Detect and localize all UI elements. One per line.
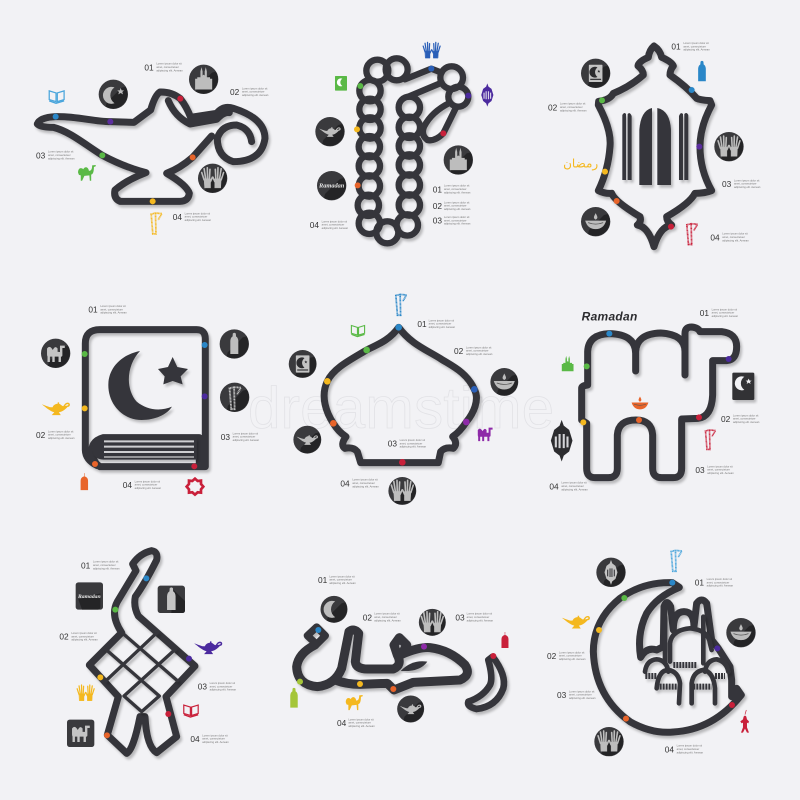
label 03: Lorem ipsum dolor sit bbox=[210, 682, 235, 685]
label 01: amet, consectetuer bbox=[444, 187, 467, 191]
label 01: 01 bbox=[144, 62, 154, 72]
label 03: amet, consectetuer bbox=[210, 684, 232, 688]
label 03: 03 bbox=[198, 682, 207, 692]
icon: hands bbox=[423, 42, 440, 58]
label 03: amet, consectetuer bbox=[734, 182, 757, 186]
label 04: adipiscing elit. Aenean bbox=[202, 740, 229, 744]
icon: lantern bbox=[551, 420, 572, 461]
label 03: adipiscing elit. Aenean bbox=[467, 618, 494, 622]
label 02: 02 bbox=[721, 414, 731, 424]
crescent bbox=[108, 351, 172, 420]
label 02: amet, consectetuer bbox=[560, 105, 583, 109]
icon: tag lantern bbox=[501, 632, 508, 648]
label 04 bbox=[665, 744, 704, 754]
label 02 bbox=[548, 102, 587, 112]
label 01: Lorem ipsum dolor sit bbox=[712, 308, 737, 311]
label 04: amet, consectetuer bbox=[348, 721, 371, 725]
icon: mosque disc bbox=[189, 65, 218, 94]
label 02: Lorem ipsum dolor sit bbox=[560, 103, 585, 106]
label 01: Lorem ipsum dolor sit bbox=[429, 319, 454, 322]
calligraphy dot bbox=[401, 661, 427, 671]
label 04: Lorem ipsum dolor sit bbox=[561, 482, 587, 485]
icon: person disc bbox=[220, 329, 249, 359]
route markers bbox=[596, 580, 735, 722]
label 03: Lorem ipsum dolor sit bbox=[400, 439, 425, 442]
icon: lamp disc bbox=[315, 117, 345, 146]
label 04: adipiscing elit. Aenean bbox=[322, 226, 349, 230]
route markers bbox=[53, 96, 196, 204]
icon: diya disc bbox=[581, 207, 610, 236]
label 04: Lorem ipsum dolor sit bbox=[135, 480, 160, 483]
icon: prayer beads bbox=[151, 213, 162, 234]
label 02: adipiscing elit. Aenean bbox=[48, 436, 75, 440]
Ramadan wordmark: Ramadan bbox=[582, 310, 637, 324]
label 04 bbox=[190, 733, 229, 744]
label 01: amet, consectetuer bbox=[100, 307, 123, 311]
label 04: Lorem ipsum dolor sit bbox=[352, 479, 378, 482]
label 02 bbox=[721, 413, 760, 424]
icon: hands bbox=[77, 685, 94, 701]
label 02: amet, consectetuer bbox=[48, 433, 71, 437]
label 02: 02 bbox=[433, 201, 442, 211]
track: bead chain bbox=[358, 58, 468, 243]
icon: camel disc bbox=[41, 339, 70, 368]
track: dome outline bbox=[324, 327, 476, 463]
icon: book bbox=[351, 326, 365, 337]
label 04: adipiscing elit. Aenean bbox=[185, 218, 212, 222]
label 01: adipiscing elit. Aenean bbox=[329, 581, 356, 585]
label 02: adipiscing elit. Aenean bbox=[466, 352, 493, 356]
label 04: amet, consectetuer bbox=[185, 215, 207, 219]
icon: orange lantern tag bbox=[81, 473, 88, 490]
label 02 bbox=[454, 345, 493, 356]
label 03: amet, consectetuer bbox=[48, 153, 71, 157]
label 04: amet, consectetuer bbox=[322, 223, 344, 227]
label 03: 03 bbox=[388, 439, 397, 449]
track: ketupat outline bbox=[89, 551, 195, 753]
label 04: 04 bbox=[173, 212, 182, 222]
label 04: 04 bbox=[337, 718, 347, 728]
label 02: amet, consectetuer bbox=[733, 417, 756, 421]
icon: camel bbox=[478, 428, 493, 441]
panel: prayer beads timeline bbox=[310, 42, 493, 243]
icon: person bbox=[698, 61, 706, 81]
route markers bbox=[324, 324, 478, 466]
label 04: Lorem ipsum dolor sit bbox=[322, 220, 347, 223]
label 01: amet, consectetuer bbox=[683, 44, 706, 48]
icon: diya disc bbox=[726, 618, 756, 647]
label 02: 02 bbox=[548, 102, 558, 112]
label 03 bbox=[722, 178, 761, 189]
label 01: amet, consectetuer bbox=[707, 580, 729, 584]
label 03: adipiscing elit. Aenean bbox=[210, 688, 237, 692]
icon: hands disc bbox=[198, 164, 227, 193]
label 01 bbox=[81, 560, 120, 570]
label 02: 02 bbox=[547, 651, 557, 661]
label 01: adipiscing elit. Aenean bbox=[444, 190, 471, 194]
icon: Ramadan disc bbox=[317, 171, 346, 200]
label 01: 01 bbox=[700, 308, 709, 318]
label 01: Lorem ipsum dolor sit bbox=[707, 578, 732, 581]
label 01 bbox=[417, 318, 456, 329]
label 03: Lorem ipsum dolor sit bbox=[48, 151, 73, 154]
label 01: adipiscing elit. Aenean bbox=[93, 566, 120, 570]
label 01: amet, consectetuer bbox=[429, 322, 451, 326]
ketupat grid weave bbox=[105, 632, 177, 712]
label 03: amet, consectetuer bbox=[444, 218, 467, 222]
icon: book bbox=[49, 91, 64, 103]
icon: prayer beads bbox=[396, 294, 407, 315]
label 03: 03 bbox=[695, 465, 705, 475]
label 02 bbox=[433, 200, 471, 211]
label 03: Lorem ipsum dolor sit bbox=[707, 465, 733, 468]
label 04: amet, consectetuer bbox=[352, 481, 375, 485]
label 02 bbox=[36, 429, 75, 440]
label 03: 03 bbox=[36, 150, 46, 160]
label 03: amet, consectetuer bbox=[467, 615, 489, 619]
label 03 bbox=[36, 150, 75, 160]
icon: green quran bbox=[335, 76, 347, 91]
track: lamp outline bbox=[37, 92, 265, 201]
track: crescent outline bbox=[593, 583, 741, 732]
label 02: Lorem ipsum dolor sit bbox=[71, 632, 97, 635]
label 02: 02 bbox=[363, 612, 372, 622]
label 02: amet, consectetuer bbox=[242, 90, 265, 94]
label 04: adipiscing elit. Aenean bbox=[352, 484, 379, 488]
panel: camel timeline bbox=[549, 307, 760, 491]
label 03 bbox=[433, 215, 471, 226]
icon: camel bbox=[78, 165, 96, 181]
label 04: 04 bbox=[549, 481, 559, 491]
label 02: Lorem ipsum dolor sit bbox=[242, 87, 267, 90]
icon: Arabic word: رمضان bbox=[563, 156, 598, 171]
label 01: 01 bbox=[81, 560, 91, 570]
label 02: adipiscing elit. Aenean bbox=[733, 420, 760, 424]
label 04: adipiscing elit. Aenean bbox=[722, 238, 749, 242]
icon: prayer beads bbox=[705, 430, 715, 449]
label 02: 02 bbox=[59, 632, 69, 642]
panel: lantern frame timeline bbox=[548, 41, 761, 247]
label 03: amet, consectetuer bbox=[233, 435, 255, 439]
label 03: Lorem ipsum dolor sit bbox=[569, 690, 594, 693]
label 01: adipiscing elit. Aenean bbox=[712, 314, 739, 318]
icon: hands disc bbox=[714, 132, 744, 161]
label 04: Lorem ipsum dolor sit bbox=[185, 212, 210, 215]
label 04: 04 bbox=[190, 734, 200, 744]
icon: red octagram bbox=[187, 479, 203, 495]
track: lantern outline bbox=[598, 46, 712, 247]
label 01: adipiscing elit. Aenean bbox=[156, 68, 183, 72]
label 01 bbox=[88, 304, 127, 315]
label 01: 01 bbox=[433, 184, 442, 194]
label 04: adipiscing elit. Aenean bbox=[135, 486, 162, 490]
track: book outline bbox=[85, 330, 205, 467]
icon: prayer beads bbox=[671, 550, 682, 571]
label 02: Lorem ipsum dolor sit bbox=[559, 651, 584, 654]
icon: lamp disc bbox=[397, 695, 424, 722]
label 02: adipiscing elit. Aenean bbox=[374, 618, 401, 622]
label 01: Lorem ipsum dolor sit bbox=[156, 63, 182, 66]
label 02: adipiscing elit. Aenean bbox=[560, 108, 587, 112]
label 02: 02 bbox=[230, 87, 240, 97]
label 01: amet, consectetuer bbox=[712, 311, 734, 315]
icon: lamp bbox=[42, 402, 70, 415]
route markers bbox=[354, 66, 471, 188]
label 01: 01 bbox=[695, 578, 704, 588]
label 04: 04 bbox=[123, 480, 132, 490]
icon: quran disc bbox=[289, 350, 317, 378]
icon: red figure bbox=[740, 710, 749, 733]
label 02: amet, consectetuer bbox=[559, 654, 582, 658]
icon: diya disc bbox=[490, 368, 518, 396]
label 04: Lorem ipsum dolor sit bbox=[348, 718, 374, 721]
route markers bbox=[297, 627, 496, 692]
label 04: 04 bbox=[710, 232, 720, 242]
label 04: amet, consectetuer bbox=[722, 235, 745, 239]
icon: hands disc bbox=[594, 727, 624, 756]
label 04: Lorem ipsum dolor sit bbox=[722, 233, 748, 236]
icon: mosque disc bbox=[444, 145, 473, 175]
watermark: dreamstime bbox=[248, 376, 554, 441]
label 03: Lorem ipsum dolor sit bbox=[734, 179, 759, 182]
book pages bbox=[93, 438, 197, 460]
label 04: amet, consectetuer bbox=[677, 747, 699, 751]
panel: dome timeline bbox=[289, 294, 518, 505]
label 04: adipiscing elit. Aenean bbox=[677, 750, 704, 754]
label 04: adipiscing elit. Aenean bbox=[348, 724, 375, 728]
icon: camel square bbox=[67, 720, 94, 747]
label 02 bbox=[363, 612, 401, 622]
label 03 bbox=[388, 438, 427, 449]
label 03: amet, consectetuer bbox=[569, 693, 592, 697]
label 04 bbox=[173, 211, 212, 222]
label 03 bbox=[221, 431, 260, 442]
label 02: adipiscing elit. Aenean bbox=[242, 93, 269, 97]
label 01: adipiscing elit. Aenean bbox=[683, 48, 710, 52]
star bbox=[158, 357, 188, 384]
icon: dark quran bbox=[732, 373, 754, 400]
label 01: 01 bbox=[671, 42, 681, 52]
icon: prayer beads bbox=[687, 224, 698, 245]
label 04: adipiscing elit. Aenean bbox=[561, 487, 588, 491]
label 04: Lorem ipsum dolor sit bbox=[202, 734, 228, 737]
label 02: 02 bbox=[454, 346, 464, 356]
label 03: adipiscing elit. Aenean bbox=[444, 222, 471, 226]
panel: crescent mosque timeline bbox=[547, 550, 756, 756]
icon: hands disc bbox=[388, 477, 416, 505]
label 03: 03 bbox=[433, 216, 442, 226]
icon: Ramadan square bbox=[76, 582, 103, 610]
icon: lantern bbox=[481, 83, 493, 107]
label 03: adipiscing elit. Aenean bbox=[569, 696, 596, 700]
route markers bbox=[599, 87, 702, 230]
label 04: 04 bbox=[665, 744, 674, 754]
icon: diya bbox=[632, 397, 648, 409]
label 02: amet, consectetuer bbox=[374, 615, 397, 619]
label 03: 03 bbox=[455, 612, 465, 622]
label 03: amet, consectetuer bbox=[400, 441, 422, 445]
label 04: amet, consectetuer bbox=[561, 484, 584, 488]
panel: ketupat timeline bbox=[59, 551, 237, 753]
label 04: 04 bbox=[340, 478, 350, 488]
label 03: adipiscing elit. Aenean bbox=[707, 471, 734, 475]
label 01: adipiscing elit. Aenean bbox=[429, 325, 456, 329]
icon: lamp bbox=[562, 616, 590, 628]
panel: Arabic calligraphy timeline bbox=[290, 574, 508, 728]
label 04 bbox=[123, 479, 162, 490]
label 02: amet, consectetuer bbox=[71, 634, 94, 638]
label 04 bbox=[710, 232, 749, 242]
label 03: adipiscing elit. Aenean bbox=[233, 438, 260, 442]
label 01 bbox=[700, 307, 739, 318]
panel: genie lamp timeline bbox=[36, 62, 269, 234]
label 03 bbox=[695, 464, 734, 475]
label 01 bbox=[144, 62, 183, 72]
label 04 bbox=[340, 478, 379, 488]
label 01: adipiscing elit. Aenean bbox=[707, 584, 734, 588]
route markers bbox=[82, 342, 208, 469]
label 03: Lorem ipsum dolor sit bbox=[233, 432, 258, 435]
label 04: 04 bbox=[310, 220, 319, 230]
label 02: Lorem ipsum dolor sit bbox=[374, 613, 400, 616]
label 01: Lorem ipsum dolor sit bbox=[444, 185, 469, 188]
label 03 bbox=[198, 681, 237, 692]
label 03: Lorem ipsum dolor sit bbox=[444, 216, 469, 219]
label 01: adipiscing elit. Aenean bbox=[100, 311, 127, 315]
label 02 bbox=[547, 650, 586, 661]
icon: Ramadan disc: Ramadan bbox=[318, 183, 345, 190]
label 01: 01 bbox=[318, 575, 328, 585]
label 01 bbox=[318, 574, 356, 585]
label 04: Lorem ipsum dolor sit bbox=[677, 745, 702, 748]
label 02: Lorem ipsum dolor sit bbox=[466, 346, 491, 349]
label 04 bbox=[337, 717, 375, 728]
label 01 bbox=[433, 184, 471, 194]
panel: book timeline bbox=[36, 304, 260, 495]
label 03: adipiscing elit. Aenean bbox=[400, 445, 427, 449]
icon: quran disc bbox=[581, 59, 610, 88]
label 02: adipiscing elit. Aenean bbox=[71, 638, 98, 642]
label 04 bbox=[549, 481, 588, 491]
track: calligraphy strokes bbox=[297, 627, 504, 709]
icon: lantern disc bbox=[596, 558, 626, 587]
label 01: Lorem ipsum dolor sit bbox=[329, 575, 355, 578]
label 03: adipiscing elit. Aenean bbox=[48, 156, 75, 160]
icon: crescent disc bbox=[99, 80, 128, 109]
label 04: amet, consectetuer bbox=[135, 483, 157, 487]
inner lantern bars bbox=[622, 108, 688, 185]
label 03: amet, consectetuer bbox=[707, 468, 730, 472]
label 02: amet, consectetuer bbox=[466, 349, 489, 353]
route markers bbox=[97, 575, 192, 738]
label 03: 03 bbox=[722, 179, 732, 189]
icon: person square bbox=[158, 586, 185, 613]
label 04: amet, consectetuer bbox=[202, 737, 225, 741]
label 02: amet, consectetuer bbox=[444, 204, 467, 208]
icon: Ramadan square: Ramadan bbox=[77, 594, 101, 600]
track: camel outline bbox=[582, 327, 737, 478]
label 01: Lorem ipsum dolor sit bbox=[93, 561, 118, 564]
label 02: adipiscing elit. Aenean bbox=[444, 207, 471, 211]
label 03: Lorem ipsum dolor sit bbox=[467, 613, 492, 616]
icon: lamp bbox=[194, 641, 222, 654]
icon: hands disc bbox=[419, 609, 446, 636]
label 02: Lorem ipsum dolor sit bbox=[48, 430, 73, 433]
label 02 bbox=[230, 86, 269, 97]
label 03: 03 bbox=[557, 690, 567, 700]
label 03 bbox=[557, 689, 596, 700]
label 01 bbox=[671, 41, 710, 52]
label 02: 02 bbox=[36, 430, 46, 440]
label 04 bbox=[310, 219, 349, 230]
label 01: Lorem ipsum dolor sit bbox=[100, 305, 126, 308]
icon: lamp disc bbox=[293, 426, 321, 454]
mosque silhouette bbox=[645, 617, 728, 703]
icon: camel bbox=[346, 695, 363, 710]
label 01: Lorem ipsum dolor sit bbox=[683, 42, 709, 45]
icon: moon disc bbox=[321, 596, 347, 623]
label 02: Lorem ipsum dolor sit bbox=[444, 201, 469, 204]
route markers bbox=[580, 331, 732, 425]
label 03: adipiscing elit. Aenean bbox=[734, 185, 761, 189]
label 01: amet, consectetuer bbox=[329, 578, 352, 582]
label 03: 03 bbox=[221, 432, 230, 442]
label 01: amet, consectetuer bbox=[93, 563, 116, 567]
label 02 bbox=[59, 631, 98, 642]
label 01: amet, consectetuer bbox=[156, 65, 179, 69]
label 02: adipiscing elit. Aenean bbox=[559, 657, 586, 661]
icon: mosque bbox=[562, 356, 574, 371]
label 01: 01 bbox=[88, 305, 98, 315]
label 01 bbox=[695, 577, 734, 588]
label 03 bbox=[455, 612, 494, 622]
icon: book bbox=[184, 705, 198, 717]
label 01: 01 bbox=[417, 319, 427, 329]
label 02: Lorem ipsum dolor sit bbox=[733, 414, 758, 417]
icon: person bbox=[290, 688, 298, 708]
icon: beads disc bbox=[220, 383, 249, 412]
